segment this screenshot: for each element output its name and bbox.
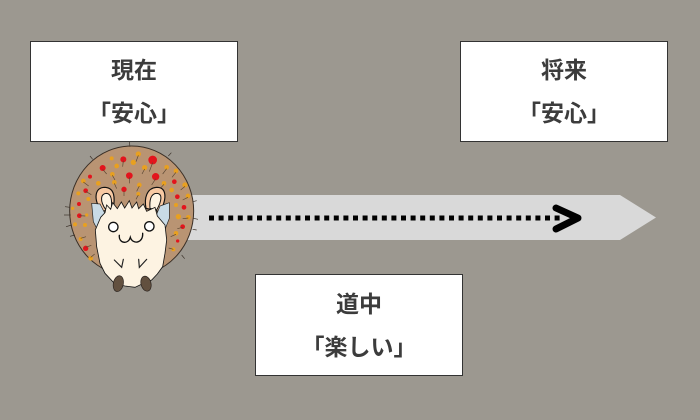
box: on the way: 「楽しい」: [302, 334, 416, 360]
box: future: 「安心」: [518, 100, 610, 126]
box: future: 将来: [541, 57, 587, 83]
box: current: 現在: [111, 57, 157, 83]
side fur patches: [92, 203, 169, 232]
box: on the way: 道中: [336, 291, 382, 317]
box: future: [460, 41, 668, 142]
spiky body: [64, 142, 198, 276]
box: current: [30, 41, 238, 142]
dotted line: [209, 216, 562, 220]
eyes: [109, 222, 154, 232]
arms: [114, 259, 147, 267]
mouth: [119, 233, 143, 242]
red quills: [77, 156, 186, 251]
box: on the way: [255, 274, 463, 376]
box: current: 「安心」: [88, 100, 180, 126]
light grey arrow band: [185, 195, 656, 240]
orange quills: [71, 151, 191, 261]
quill tails: [79, 155, 188, 257]
face and belly: [95, 201, 167, 287]
chevron head: [556, 208, 578, 229]
feet: [112, 275, 153, 293]
ears: [96, 187, 165, 212]
